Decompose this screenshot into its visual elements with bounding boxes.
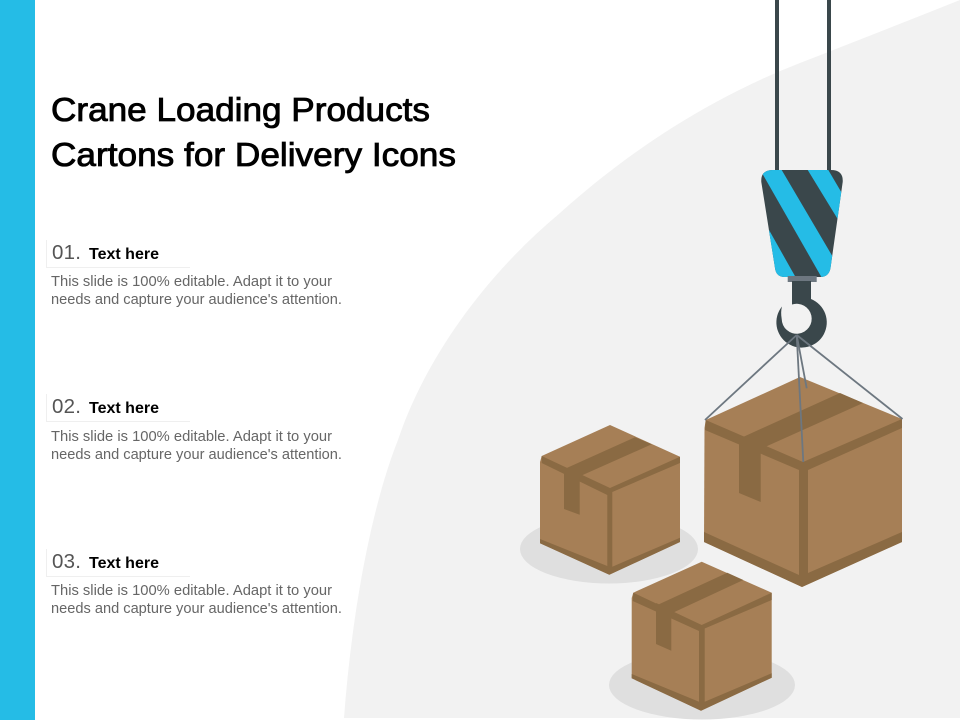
shadow under left box [520,514,698,584]
icon: crane cables [775,0,831,172]
list item 01: This slide is 100% editable. Adapt it to your [51,274,332,290]
icon: crane hook block [761,170,843,282]
list item 01: 01. [52,241,81,264]
list item 03: needs and capture your audience's attention. [51,601,342,617]
list item 02: 02. [52,395,81,418]
background curve [344,0,960,718]
icon: hanging carton [704,377,902,587]
list item 01: needs and capture your audience's attention. [51,292,342,308]
icon: crane hook [776,281,827,348]
icon: lifting ropes [705,335,902,462]
shadow under bottom box [609,650,795,720]
title [51,91,456,173]
icon: bottom carton [632,562,772,711]
list item 01: Text here [89,246,159,263]
list item 03: Text here [89,555,159,572]
list item 03: This slide is 100% editable. Adapt it to your [51,583,332,599]
list item 01 [46,240,342,308]
left accent bar [0,0,35,720]
list item 02 [46,394,342,463]
title: Crane Loading Products [51,91,430,128]
list item 03: 03. [52,550,81,573]
list item 02: needs and capture your audience's attention. [51,447,342,463]
title: Cartons for Delivery Icons [51,136,456,173]
list item 03 [46,549,342,617]
list item 02: This slide is 100% editable. Adapt it to your [51,429,332,445]
list item 02: Text here [89,400,159,417]
icon: left carton [540,425,680,575]
